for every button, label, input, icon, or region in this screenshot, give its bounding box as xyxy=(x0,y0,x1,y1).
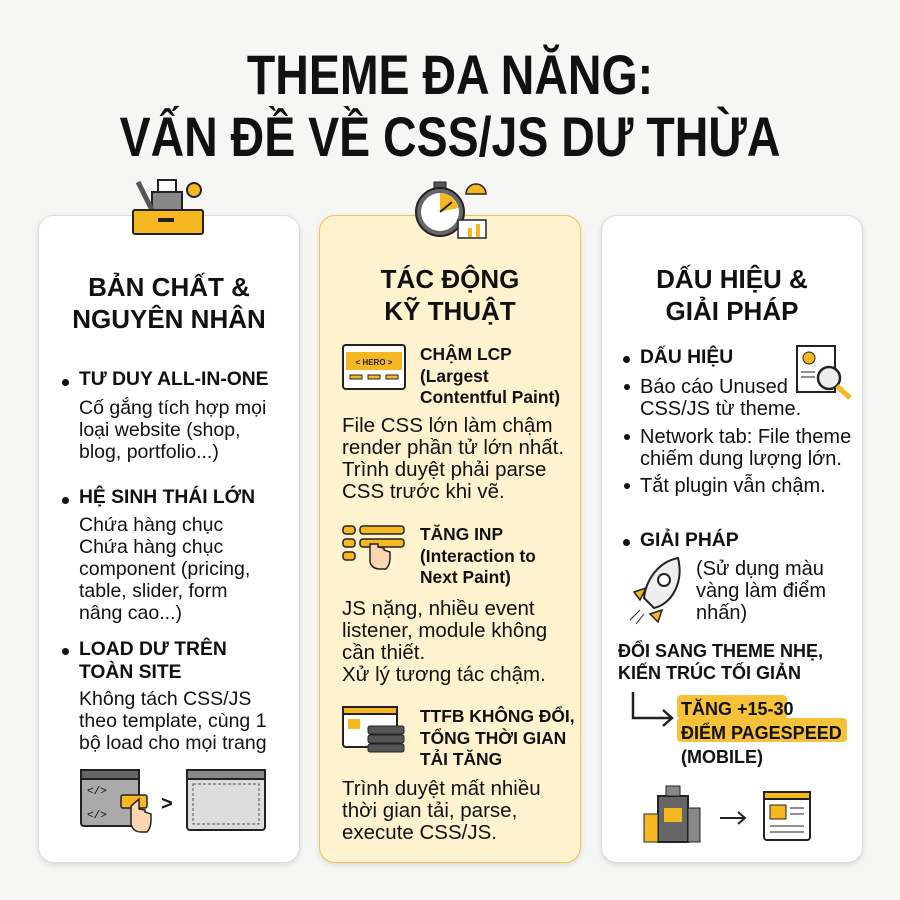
item: TTFB: TỔNG THỜI GIAN xyxy=(420,728,566,748)
item: INP: (Interaction to xyxy=(420,546,536,566)
bullet: all-in-one: loại website (shop, xyxy=(79,419,241,441)
item: TTFB: thời gian tải, parse, xyxy=(342,799,517,822)
text: switch theme: KIẾN TRÚC TỐI GIẢN xyxy=(618,662,801,682)
item: LCP: File CSS lớn làm chậm xyxy=(342,414,553,437)
callout: pagespeed gain: ĐIỂM PAGESPEED xyxy=(681,723,842,743)
icon: window and servers xyxy=(342,706,404,752)
bullet: all-in-one: Cố gắng tích hợp mọi xyxy=(79,397,266,419)
item: INP: cần thiết. xyxy=(342,641,425,664)
bullet: ecosystem xyxy=(62,486,255,624)
bullet: ecosystem: Chứa hàng chục xyxy=(79,514,223,536)
item: LCP: CSS trước khi vẽ. xyxy=(342,480,505,503)
bullet: all-in-one: TƯ DUY ALL-IN-ONE xyxy=(79,369,269,390)
text: switch theme: ĐỔI SANG THEME NHẸ, xyxy=(618,641,823,661)
heading: causes: BẢN CHẤT & xyxy=(88,272,250,302)
heading: causes xyxy=(72,272,266,334)
callout: pagespeed gain xyxy=(677,695,847,767)
icon: building to light page xyxy=(644,786,811,843)
list: signs: chiếm dung lượng lớn. xyxy=(640,448,842,470)
list: signs: CSS/JS từ theme. xyxy=(640,398,801,420)
item: TTFB: TẢI TĂNG xyxy=(420,749,502,769)
bullet: ecosystem: component (pricing, xyxy=(79,558,250,580)
list: signs xyxy=(623,346,851,497)
item: TTFB xyxy=(342,706,575,844)
heading: signs: DẤU HIỆU & xyxy=(656,264,808,294)
icon: toolbox xyxy=(132,179,204,235)
arrow: bent xyxy=(632,692,674,727)
icon: code window to blank window: </> xyxy=(87,786,107,798)
icon: buttons with hand xyxy=(342,525,405,570)
icon: stopwatch xyxy=(415,182,487,239)
panel: signs and solutions xyxy=(601,215,863,863)
item: LCP: render phần tử lớn nhất. xyxy=(342,436,564,459)
bullet: load site-wide: TOÀN SITE xyxy=(79,662,182,683)
item: INP xyxy=(342,524,547,686)
title: VẤN ĐỀ VỀ CSS/JS DƯ THỪA xyxy=(120,105,780,168)
list: signs: Tắt plugin vẫn chậm. xyxy=(640,475,826,497)
bullet: load site-wide: theo template, cùng 1 xyxy=(79,710,267,732)
icon: rocket xyxy=(630,556,681,624)
heading: impact: TÁC ĐỘNG xyxy=(381,264,519,294)
panel: causes xyxy=(38,215,300,863)
bullet: all-in-one: blog, portfolio...) xyxy=(79,441,219,463)
heading: signs xyxy=(656,264,808,326)
heading: signs: GIẢI PHÁP xyxy=(666,296,798,326)
list: signs: Báo cáo Unused xyxy=(640,376,788,398)
text: solution note: (Sử dụng màu xyxy=(696,558,824,580)
item: INP: JS nặng, nhiều event xyxy=(342,597,535,620)
bullet: load site-wide: Không tách CSS/JS xyxy=(79,688,251,710)
item: LCP xyxy=(342,344,564,503)
bullet: ecosystem: table, slider, form xyxy=(79,580,227,602)
icon: hero window xyxy=(342,344,406,390)
icon: code window to blank window xyxy=(80,769,266,833)
bullet: all-in-one xyxy=(62,369,269,463)
title: THEME ĐA NĂNG: xyxy=(247,43,653,106)
icon: code window to blank window: </> xyxy=(87,810,107,822)
bullet: ecosystem: HỆ SINH THÁI LỚN xyxy=(79,487,255,508)
item: TTFB: execute CSS/JS. xyxy=(342,821,497,844)
heading: impact: KỸ THUẬT xyxy=(384,296,516,326)
item: TTFB: Trình duyệt mất nhiều xyxy=(342,777,541,800)
item: LCP: Contentful Paint) xyxy=(420,387,560,407)
bullet: load site-wide: LOAD DƯ TRÊN xyxy=(79,639,227,660)
list: signs: Network tab: File theme xyxy=(640,426,851,448)
heading: impact xyxy=(380,264,519,326)
bullet: load site-wide: bộ load cho mọi trang xyxy=(79,732,267,754)
icon: code window to blank window: > xyxy=(161,793,173,815)
text: solution note: vàng làm điểm xyxy=(696,580,826,602)
item: INP: listener, module không xyxy=(342,619,547,642)
list: signs: DẤU HIỆU xyxy=(640,347,733,368)
item: INP: Xử lý tương tác chậm. xyxy=(342,663,546,686)
item: LCP: CHẬM LCP xyxy=(420,344,512,364)
text: solution note: nhấn) xyxy=(696,602,747,624)
bullet: ecosystem: nâng cao...) xyxy=(79,602,182,624)
item: LCP: Trình duyệt phải parse xyxy=(342,458,546,481)
item: INP: TĂNG INP xyxy=(420,524,503,544)
item: INP: Next Paint) xyxy=(420,567,511,587)
item: TTFB: TTFB KHÔNG ĐỔI, xyxy=(420,706,575,726)
panel: impact xyxy=(319,215,581,863)
title xyxy=(120,43,780,168)
item: LCP: (Largest xyxy=(420,366,489,386)
bullet: load site-wide xyxy=(62,638,267,754)
text: solution note xyxy=(696,558,826,624)
icon: hero window: < HERO > xyxy=(356,358,393,367)
callout: pagespeed gain: TĂNG +15-30 xyxy=(681,699,794,719)
heading: solution: GIẢI PHÁP xyxy=(640,530,739,551)
bullet: ecosystem: Chứa hàng chục xyxy=(79,536,223,558)
heading: causes: NGUYÊN NHÂN xyxy=(72,304,266,334)
callout: pagespeed gain: (MOBILE) xyxy=(681,747,763,767)
text: switch theme xyxy=(618,640,823,682)
icon: report magnifier xyxy=(796,345,852,400)
